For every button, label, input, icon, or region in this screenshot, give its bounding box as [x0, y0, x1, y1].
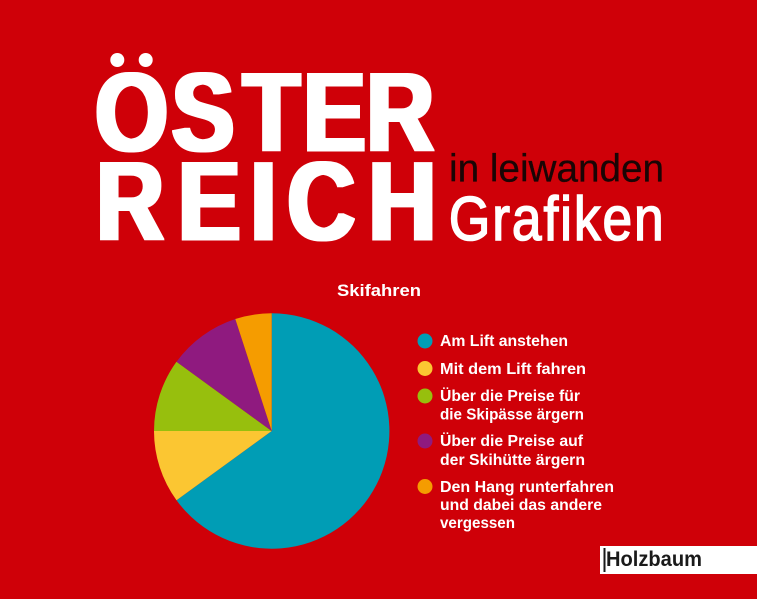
legend item: Den Hang runterfahren: und dabei das andere	[440, 497, 602, 514]
legend item: Preise Skihütte: der Skihütte ärgern	[440, 452, 585, 469]
publisher logo	[600, 546, 757, 574]
title: REICH	[96, 138, 436, 264]
legend item: Preise Skipässe: die Skipässe ärgern	[440, 406, 584, 424]
title	[95, 44, 436, 264]
legend	[418, 333, 614, 532]
subtitle: in leiwanden	[449, 148, 664, 190]
legend item: Am Lift anstehen: Am Lift anstehen	[440, 333, 568, 350]
subtitle	[449, 148, 666, 254]
legend item: Den Hang runterfahren: vergessen	[440, 515, 515, 532]
legend item: Preise Skipässe	[418, 388, 584, 424]
legend item: Mit dem Lift fahren: Mit dem Lift fahren	[440, 361, 586, 378]
legend item: Den Hang runterfahren: Den Hang runterfahren	[440, 479, 614, 496]
legend item: Preise Skipässe: Über die Preise für	[440, 388, 580, 405]
chart heading: Skifahren	[337, 281, 421, 300]
subtitle: Grafiken	[449, 185, 666, 254]
pie chart	[154, 313, 389, 549]
publisher logo: Holzbaum	[606, 548, 702, 571]
legend item: Den Hang runterfahren	[418, 479, 614, 532]
title: ÖSTER	[95, 49, 434, 175]
legend item: Preise Skihütte: Über die Preise auf	[440, 433, 584, 450]
legend item: Preise Skihütte	[418, 433, 585, 469]
